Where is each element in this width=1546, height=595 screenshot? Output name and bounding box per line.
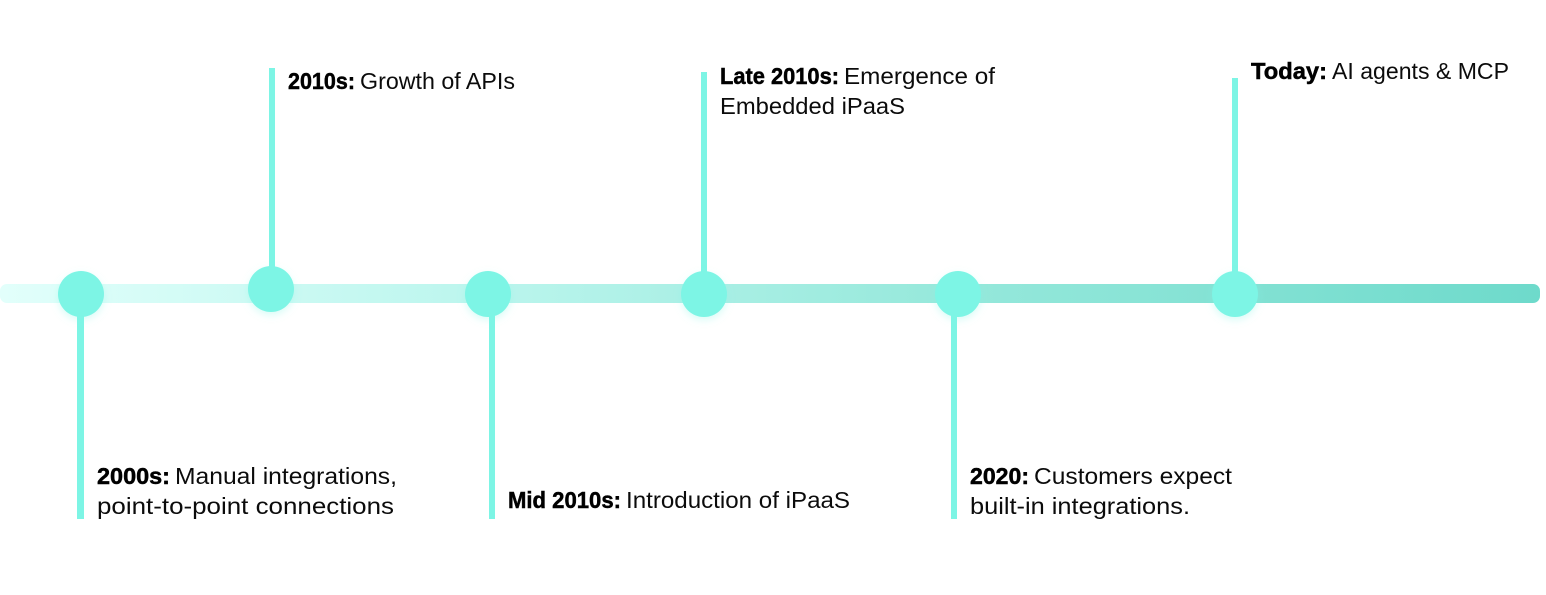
label: Late 2010s: Emergence of xyxy=(844,63,995,89)
label: 2000s: Manual integrations, xyxy=(175,463,397,489)
label: Today: Today: xyxy=(1251,58,1327,84)
milestone: Mid 2010s xyxy=(465,271,850,519)
label: Mid 2010s: Mid 2010s: xyxy=(508,487,621,513)
label: 2020: Customers expect xyxy=(1034,463,1232,489)
label: Late 2010s: Embedded iPaaS xyxy=(720,93,905,119)
label: Today: AI agents & MCP xyxy=(1332,58,1509,84)
milestone: 2010s xyxy=(248,68,515,312)
label: Late 2010s: Late 2010s: xyxy=(720,63,839,89)
milestone: 2000s xyxy=(58,271,397,519)
label: Mid 2010s: Introduction of iPaaS xyxy=(626,487,850,513)
timeline bar xyxy=(0,284,1540,303)
label: 2000s: point-to-point connections xyxy=(97,493,394,519)
label: 2010s: Growth of APIs xyxy=(360,68,515,94)
label: 2010s: 2010s: xyxy=(288,68,355,94)
label: 2000s: 2000s: xyxy=(97,463,170,489)
milestone: 2020 xyxy=(935,271,1232,519)
label: 2020: 2020: xyxy=(970,463,1029,489)
milestone: Late 2010s xyxy=(681,63,995,317)
milestone: Today xyxy=(1212,58,1509,317)
label: 2020: built-in integrations. xyxy=(970,493,1190,519)
